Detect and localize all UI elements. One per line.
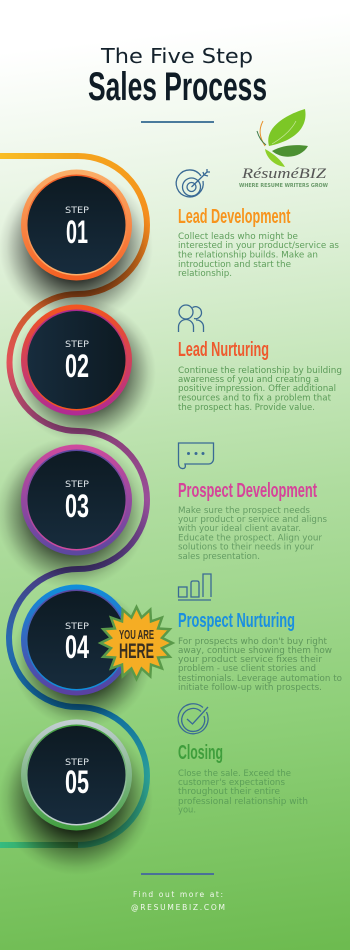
footer text [131,890,225,912]
body text [178,366,342,413]
step 2 circle: 02 [65,348,89,384]
body text: Educate the prospect. Align your [178,534,322,544]
body text: Collect leads who might be [178,232,298,242]
you are here badge [100,607,172,679]
body text [178,637,342,693]
body text: Continue the relationship by building [178,366,342,376]
body text [178,232,340,279]
body text: Close the sale. Exceed the [178,769,291,779]
body text: initiate follow-up with prospects. [178,683,322,693]
panel: prospect development [178,443,328,562]
logo [239,109,328,189]
body text: introduction and start the [178,260,291,270]
step 4 circle: STEP [65,622,89,632]
step 2 circle [21,304,132,416]
body text: away, continue showing them how [178,646,332,656]
body text: the prospect has. Provide value. [178,403,315,413]
panel: prospect nurturing [178,574,342,693]
step 2 circle: STEP [65,340,89,350]
body text: customer's expectations [178,778,286,788]
body text: awareness of you and creating a [178,375,319,385]
panel: lead development [176,169,340,279]
step 3 circle [21,444,132,556]
winding path [0,156,147,845]
body text: your product service fixes their [178,655,323,665]
step 3 circle: STEP [65,480,89,490]
icon: target [176,169,210,197]
body text: relationship. [178,269,232,279]
logo: RésuméBIZ [241,166,327,182]
body text: professional relationship with [178,797,308,807]
icon: people [178,305,204,332]
heading: Closing [178,742,223,764]
footer text: @RESUMEBIZ.COM [131,903,225,912]
heading: Lead Nurturing [178,339,269,361]
body text: solutions to their needs in your [178,542,314,552]
step 4 circle: 04 [65,629,89,665]
step 5 circle [21,720,132,830]
title [88,44,267,109]
body text: problem - use client stories and [178,664,316,674]
step 5 circle: STEP [65,758,89,768]
body text [178,506,328,562]
step 1 circle: 01 [66,214,88,250]
body text: throughout their entire [178,787,280,797]
body text: you. [178,806,196,816]
body text: with your ideal client avatar. [178,524,301,534]
icon: speech bubble [178,443,214,469]
icon: bar chart [178,574,211,600]
drop shadows [0,170,156,875]
step 1 circle [21,170,132,280]
body text: positive impression. Offer additional [178,384,336,394]
icon: check mark [178,704,208,734]
body text: resources and to fix a problem that [178,394,332,404]
panel: closing [178,704,308,816]
panel: lead nurturing [178,305,342,413]
title: The Five Step [100,44,253,68]
logo: WHERE RESUME WRITERS GROW [239,183,328,189]
body text: the relationship builds. Make an [178,250,318,260]
step 1 circle: STEP [65,206,89,216]
body text: For prospects who don't buy right [178,637,328,647]
you are here badge: HERE [119,640,154,663]
footer text: Find out more at: [133,890,223,899]
body text: interested in your product/service as [178,241,340,251]
body text: your product or service and aligns [178,515,328,525]
body text: testimonials. Leverage automation to [178,674,342,684]
step 4 circle [21,584,132,696]
you are here badge: YOU ARE [119,627,154,642]
body text [178,769,308,816]
step 3 circle: 03 [65,488,89,524]
body text: Make sure the prospect needs [178,506,311,516]
body text: sales presentation. [178,552,260,562]
step 5 circle: 05 [65,764,89,800]
